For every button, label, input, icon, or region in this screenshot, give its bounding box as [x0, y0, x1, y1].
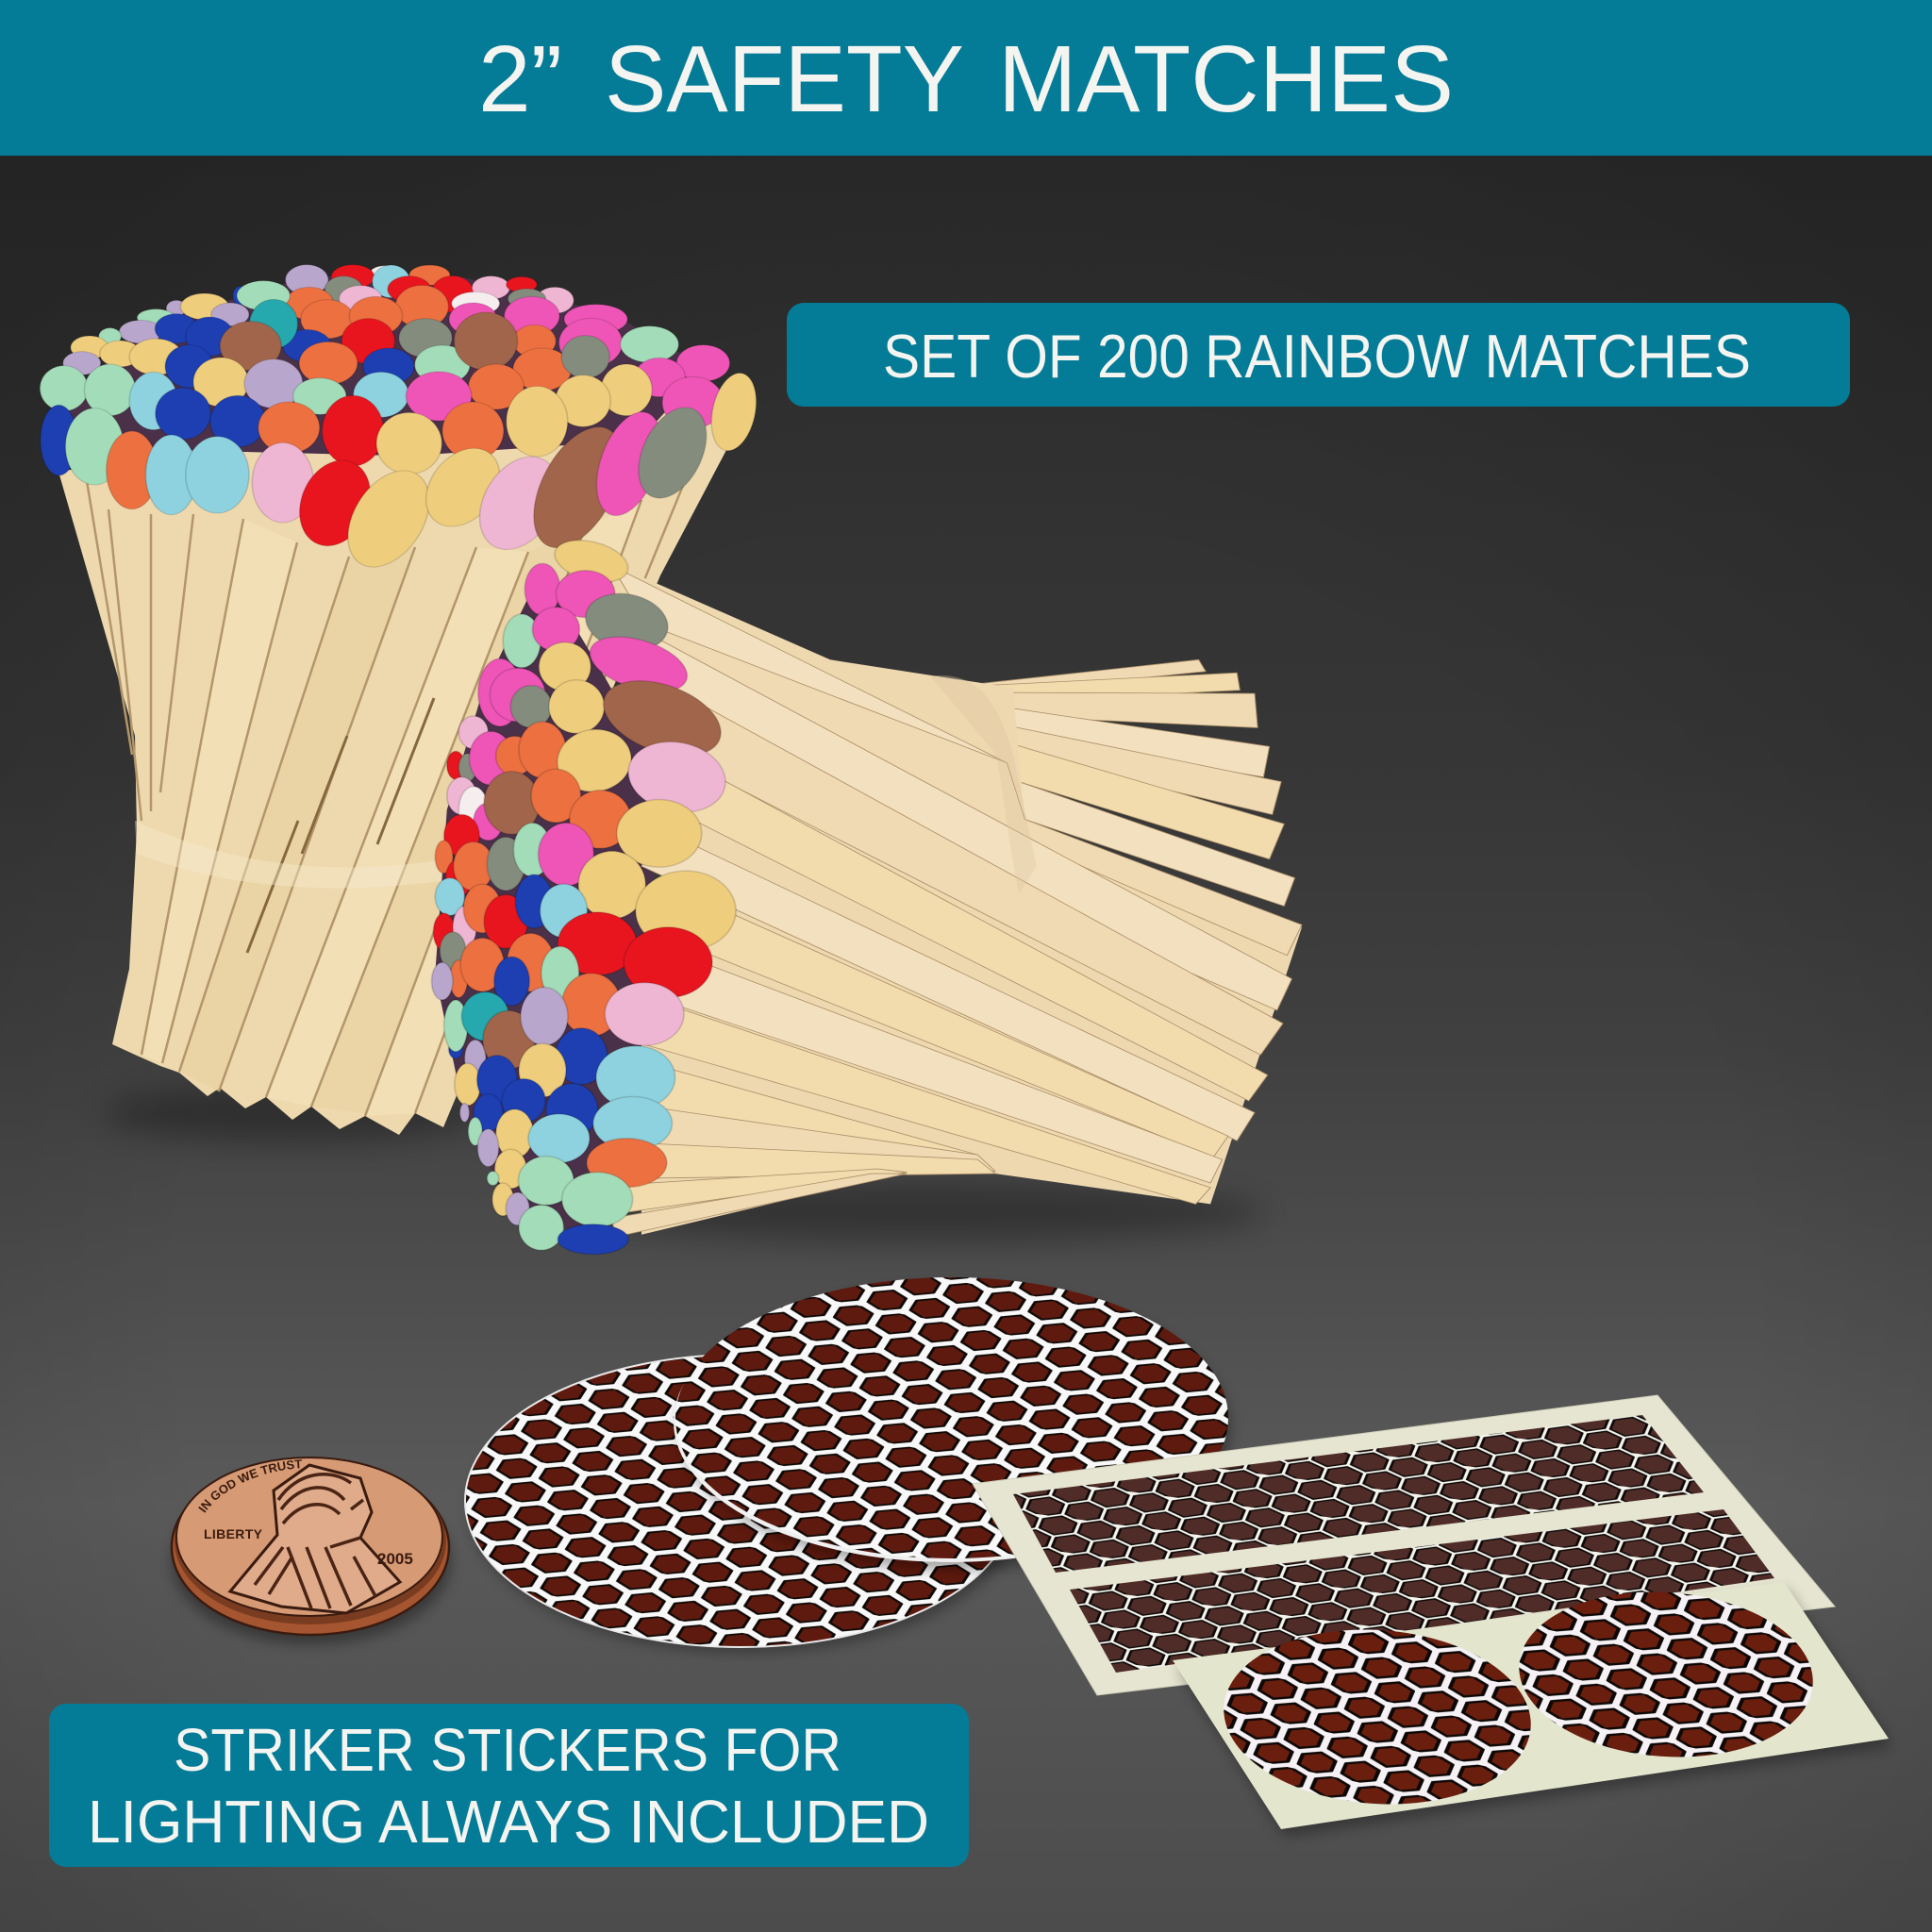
right bundle body silhouette	[633, 573, 1302, 1235]
header banner	[0, 0, 1932, 156]
callout: striker stickers: LIGHTING ALWAYS INCLUDED	[88, 1788, 929, 1856]
striker sticker sheet with circles	[1173, 1582, 1892, 1837]
striker strip top	[1013, 1415, 1704, 1573]
left bundle sticks	[58, 396, 755, 1135]
left bundle head backing	[61, 276, 706, 456]
right bundle match heads	[432, 532, 750, 1255]
penny: LIBERTY	[204, 1526, 263, 1541]
title: SAFETY	[605, 26, 964, 132]
right bundle back stick ends	[983, 659, 1294, 906]
penny inscriptions: IN GOD WE TRUST	[198, 1459, 302, 1513]
sticker circle right	[1513, 1582, 1819, 1767]
title: MATCHES	[998, 26, 1454, 132]
striker sticker sheet with strips	[973, 1395, 1835, 1695]
right bundle of matches	[432, 532, 1302, 1255]
shadows under match bundles	[104, 1085, 1264, 1241]
title: 2”	[478, 26, 562, 132]
right bundle main sticks	[612, 566, 1302, 1237]
penny	[168, 1457, 455, 1648]
penny bust	[230, 1465, 400, 1613]
paper band on right bundle	[930, 675, 1037, 894]
lower striker circle	[465, 1355, 1016, 1647]
right bundle head backing	[435, 571, 659, 1237]
callout: striker stickers: STRIKER STICKERS FOR	[174, 1716, 841, 1784]
upper striker circle	[675, 1277, 1228, 1558]
left bundle match heads	[40, 265, 762, 573]
title	[478, 26, 1454, 132]
striker circles	[465, 1277, 1230, 1653]
callout: striker stickers	[49, 1704, 969, 1867]
left bundle of matches	[40, 265, 762, 1135]
callout: set of 200 rainbow matches: SET OF 200 RAINBOW MATCHES	[883, 322, 1751, 391]
penny: 2005	[377, 1550, 413, 1568]
striker strip bottom	[1070, 1509, 1774, 1673]
waist band on left bundle	[135, 821, 476, 888]
sticker circle left	[1218, 1620, 1537, 1814]
callout: set of 200 rainbow matches	[787, 303, 1850, 407]
